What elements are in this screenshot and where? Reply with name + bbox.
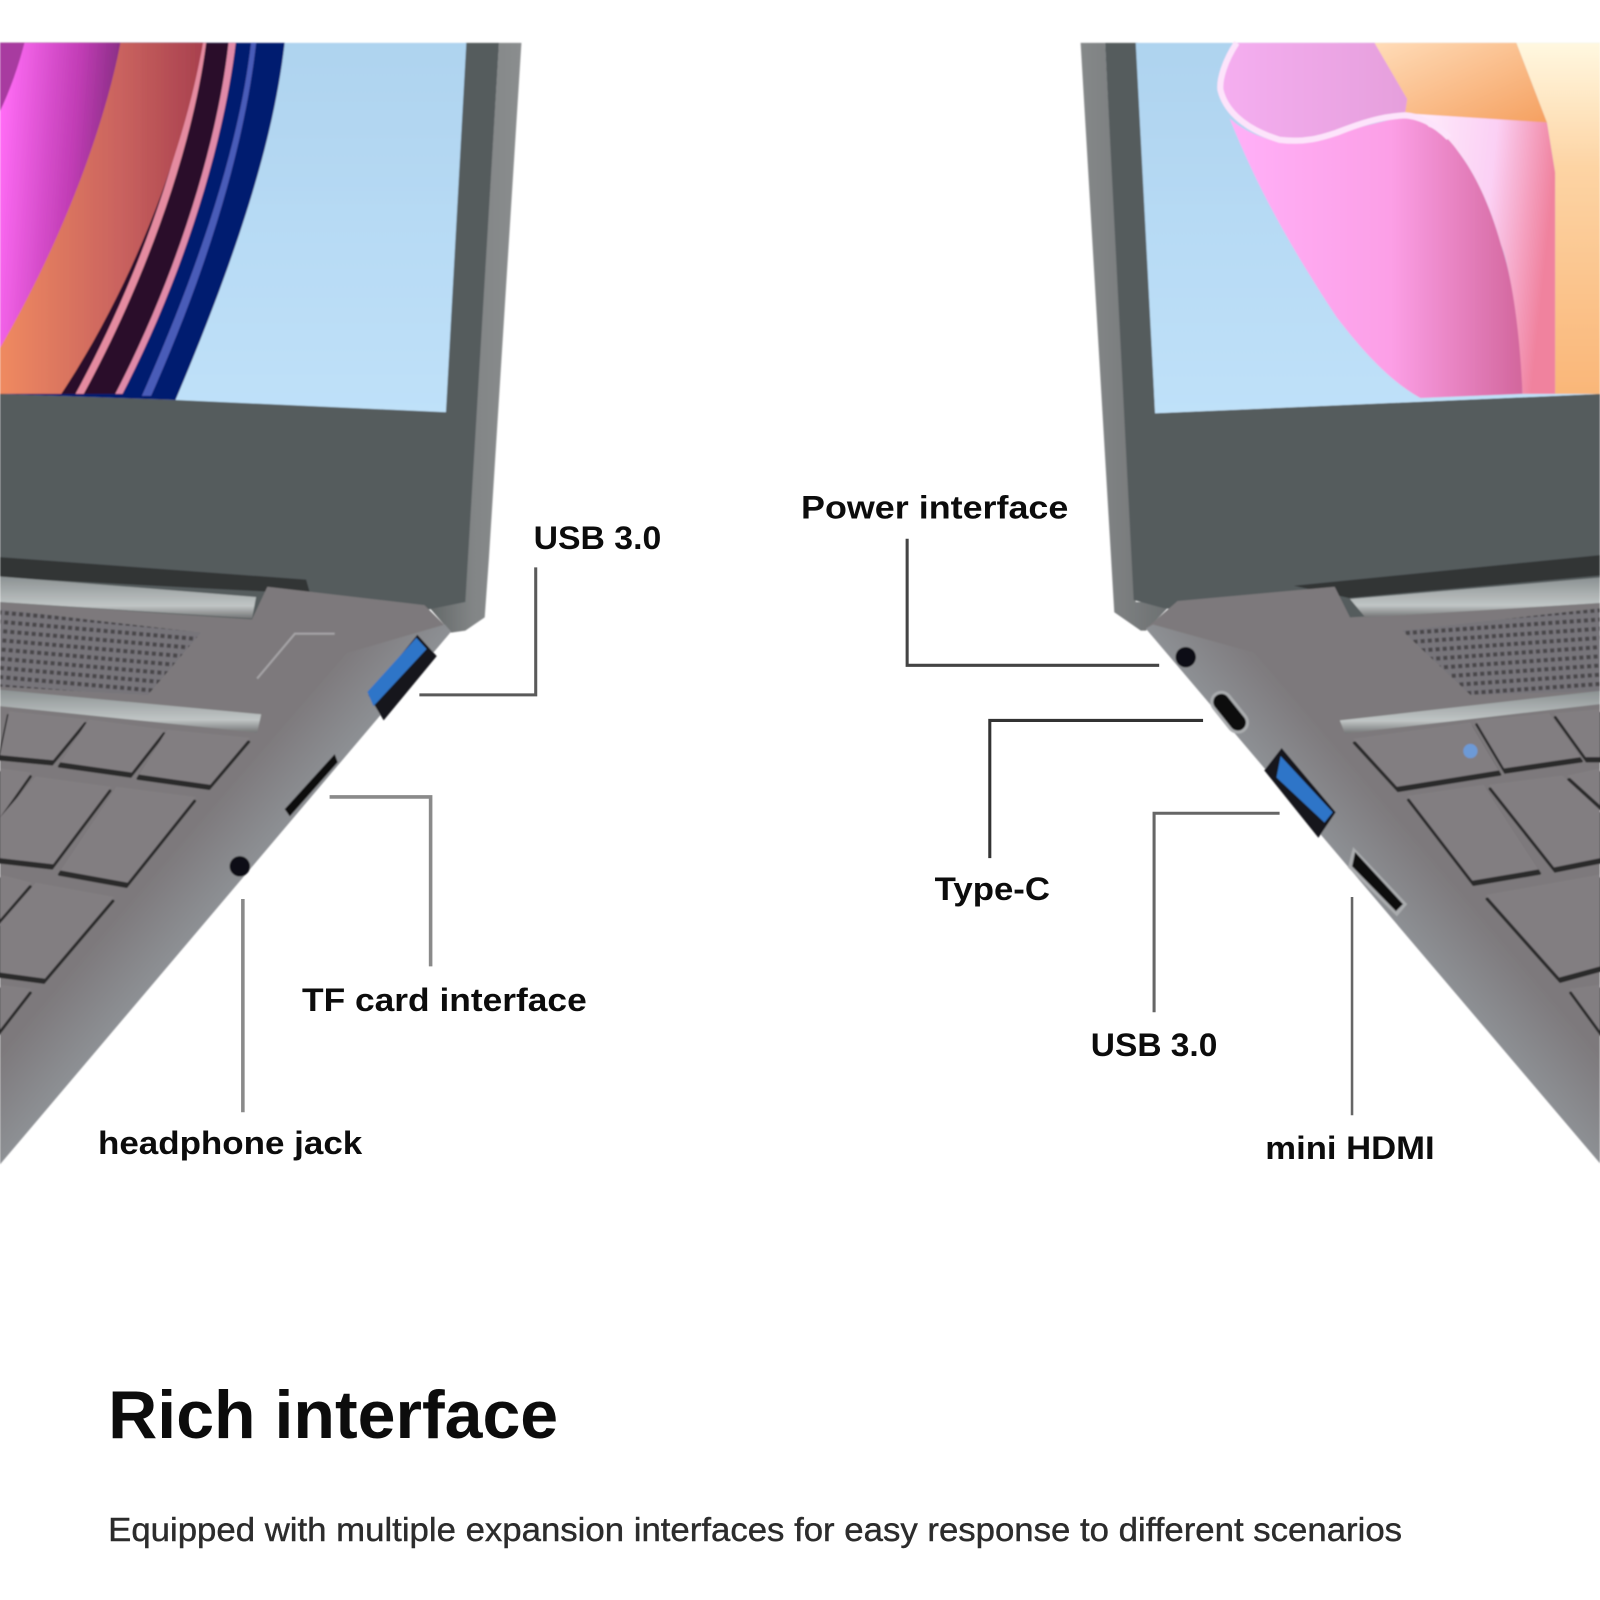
- key indicator light: [1463, 744, 1478, 758]
- label: mini HDMI: [1265, 1129, 1435, 1166]
- label: Type-C: [935, 870, 1050, 907]
- label: TF card interface: [302, 981, 587, 1018]
- wallpaper: right screen: [1136, 43, 1600, 413]
- hinge shadow: [0, 557, 310, 594]
- callout: USB 3.0 right: [1091, 813, 1280, 1063]
- speaker grille: [0, 609, 201, 695]
- label: USB 3.0: [534, 519, 661, 556]
- screen bezel: [1105, 43, 1600, 624]
- port: USB 3.0: [367, 635, 437, 720]
- leader line: [419, 567, 536, 695]
- callout: Type-C: [935, 720, 1203, 907]
- leader line: [1154, 813, 1280, 1012]
- top light strip: [0, 577, 256, 618]
- title: Rich interface: [108, 1378, 558, 1453]
- keyboard deck: [1146, 587, 1600, 1163]
- keyboard deck: [0, 587, 451, 1164]
- leader line: [907, 539, 1159, 665]
- port: TF card slot: [285, 754, 338, 816]
- port: Type-C: [1221, 702, 1238, 722]
- callout: Power interface: [801, 488, 1159, 665]
- port: power jack: [1176, 647, 1196, 667]
- label: headphone jack: [98, 1124, 363, 1161]
- callout: USB 3.0 left: [419, 519, 661, 695]
- leader line: [1351, 897, 1353, 1115]
- top light strip: [1350, 578, 1600, 617]
- lower light strip: [1340, 691, 1600, 734]
- label: Power interface: [801, 488, 1068, 525]
- lid edge: [424, 43, 521, 633]
- fingerprint sensor outline: [257, 634, 335, 679]
- leader line: [990, 720, 1203, 858]
- hinge shadow: [1294, 555, 1600, 598]
- port: USB 3.0: [1264, 748, 1336, 838]
- port: mini HDMI: [1348, 847, 1407, 916]
- callout: TF card interface: [302, 797, 587, 1018]
- port: headphone jack: [230, 856, 250, 877]
- lid edge: [1081, 43, 1173, 631]
- keyboard keys: [1353, 709, 1600, 1035]
- subtitle text: Equipped with multiple expansion interfaces for easy response to different scenarios: [108, 1512, 1402, 1549]
- deck chamfer: [1146, 624, 1600, 1163]
- leader line: [330, 797, 431, 966]
- screen bezel: [0, 43, 499, 624]
- wallpaper: left screen: [0, 43, 466, 412]
- keyboard keys: [0, 711, 250, 1034]
- leader line: [241, 899, 245, 1112]
- panel: left laptop corner: [0, 43, 521, 1164]
- panel: right laptop corner: [1081, 43, 1600, 1163]
- lower light strip: [0, 690, 261, 733]
- speaker grille: [1402, 608, 1600, 695]
- deck chamfer: [0, 624, 451, 1164]
- label: USB 3.0: [1091, 1026, 1217, 1063]
